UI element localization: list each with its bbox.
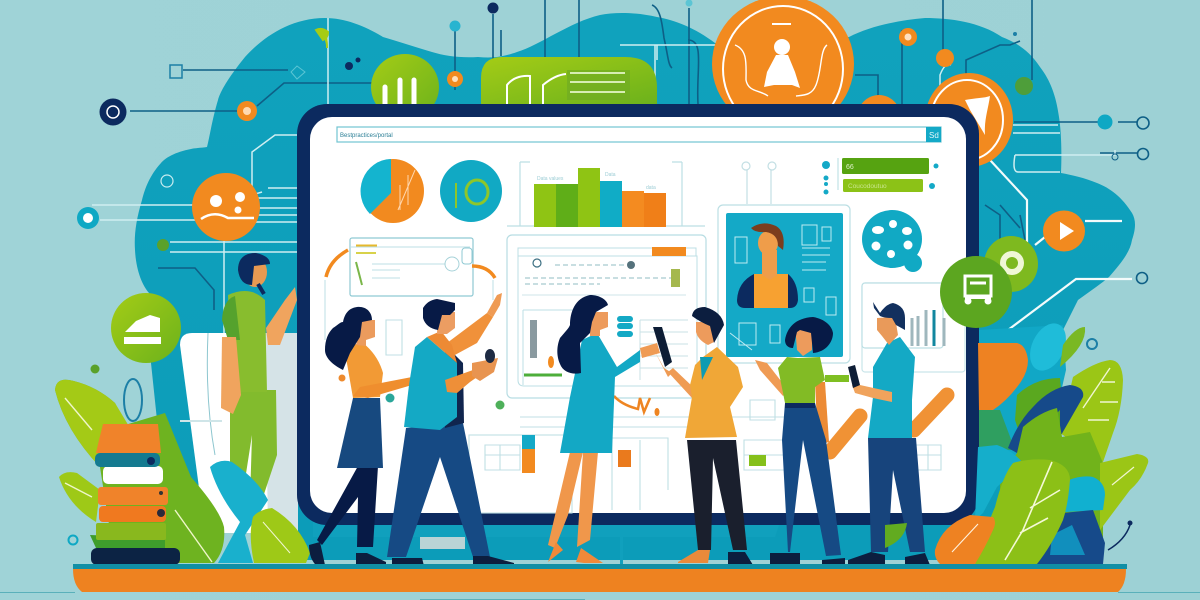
back-left person in green bbox=[221, 253, 297, 500]
teal background blob bbox=[135, 13, 1135, 560]
left green circle icon bbox=[111, 293, 181, 363]
orange pills bbox=[830, 395, 947, 452]
woman in blue dress bbox=[548, 295, 660, 563]
right foliage bbox=[885, 318, 1148, 564]
film reel icon bbox=[862, 210, 922, 272]
left orange circle icon bbox=[192, 173, 260, 241]
status bars: 66 bbox=[846, 164, 854, 171]
pin markers bbox=[742, 162, 776, 204]
bar chart: Data values bbox=[537, 176, 564, 182]
bar chart: Data bbox=[605, 172, 616, 178]
monitor stand bbox=[313, 522, 780, 564]
status bars bbox=[822, 158, 938, 194]
monitor frame bbox=[297, 104, 979, 525]
woman in green top bbox=[755, 317, 845, 566]
small report card bbox=[862, 283, 965, 372]
orange half circle behind screen bbox=[857, 95, 901, 141]
white panel behind left figure bbox=[180, 333, 298, 533]
search bar: Bestpractices/portal bbox=[340, 133, 393, 139]
circuit lines bbox=[130, 0, 1142, 310]
play button icon bbox=[1043, 210, 1085, 252]
small chart accents bbox=[386, 316, 849, 473]
right orange circle icon bbox=[925, 73, 1013, 167]
woman in orange top and blue skirt bbox=[309, 307, 412, 567]
man in teal t-shirt bbox=[848, 302, 930, 565]
monitor screen bbox=[310, 117, 966, 513]
lower dashboard tiles bbox=[386, 320, 941, 513]
central dashboard panel bbox=[507, 235, 706, 398]
bar chart: data bbox=[646, 185, 656, 191]
left form card bbox=[325, 238, 495, 340]
pie chart bbox=[361, 159, 424, 223]
top green rounded panel bbox=[481, 57, 657, 104]
profile card bbox=[718, 205, 850, 363]
stack of books bbox=[90, 424, 180, 565]
bar chart bbox=[507, 162, 705, 227]
woman in mustard jacket with phone bbox=[653, 307, 753, 565]
search bar bbox=[337, 127, 941, 142]
top green circle icon bbox=[371, 54, 439, 120]
search bar: Sd bbox=[929, 131, 939, 140]
left foliage and books bbox=[55, 380, 310, 563]
large orange circle icon bbox=[712, 0, 854, 132]
man in teal jacket bbox=[387, 293, 514, 567]
right green circle icons bbox=[940, 236, 1038, 328]
teal circle metric bbox=[440, 160, 502, 222]
status bars: Coucodoutuo bbox=[848, 183, 887, 190]
platform bbox=[0, 564, 1200, 600]
